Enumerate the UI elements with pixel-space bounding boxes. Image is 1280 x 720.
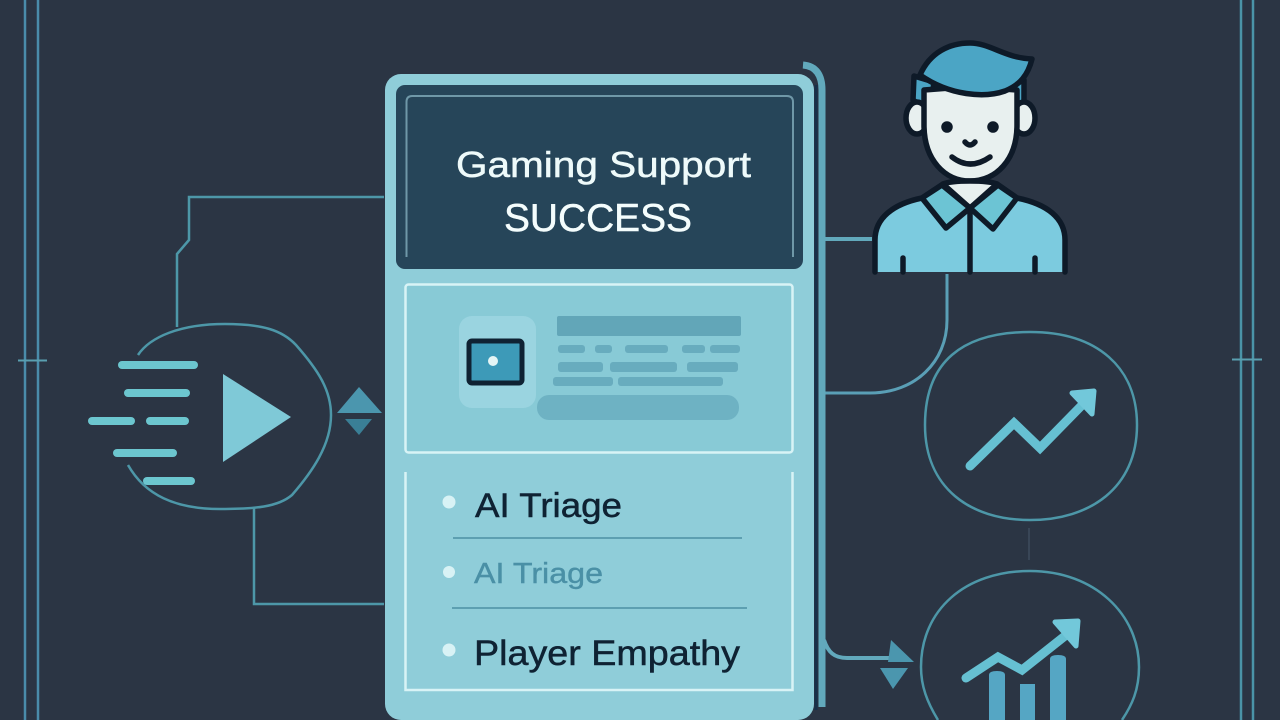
- list item: AI Triage: AI Triage: [475, 487, 622, 525]
- panel: header: [396, 85, 803, 269]
- arrow: card to growth circle: [824, 640, 914, 689]
- connector: card to left circle, top: [177, 197, 384, 327]
- title line 2: SUCCESS: [504, 197, 692, 240]
- icon: media thumbnail: [459, 316, 536, 408]
- panel: media preview: [406, 284, 792, 452]
- placeholder text bars: [537, 316, 741, 420]
- icon: growth bars circle: [921, 571, 1139, 720]
- panel: feature list: [406, 472, 792, 690]
- connector: person to trend circle: [825, 274, 947, 393]
- list item: Player Empathy: Player Empathy: [474, 634, 741, 673]
- title line 1: Gaming Support: [456, 144, 751, 185]
- icon: trend line circle: [925, 332, 1137, 520]
- icon: support agent person: [875, 43, 1065, 272]
- icon: diamond arrows: [337, 387, 382, 435]
- icon: play circle with speed lines: [88, 324, 331, 509]
- connector: card to left circle, bottom: [254, 508, 384, 604]
- card side rail: [803, 65, 822, 707]
- panel: main card: [385, 74, 816, 720]
- connector: card to person: [825, 237, 872, 241]
- list item: AI Triage secondary: AI Triage: [474, 558, 603, 590]
